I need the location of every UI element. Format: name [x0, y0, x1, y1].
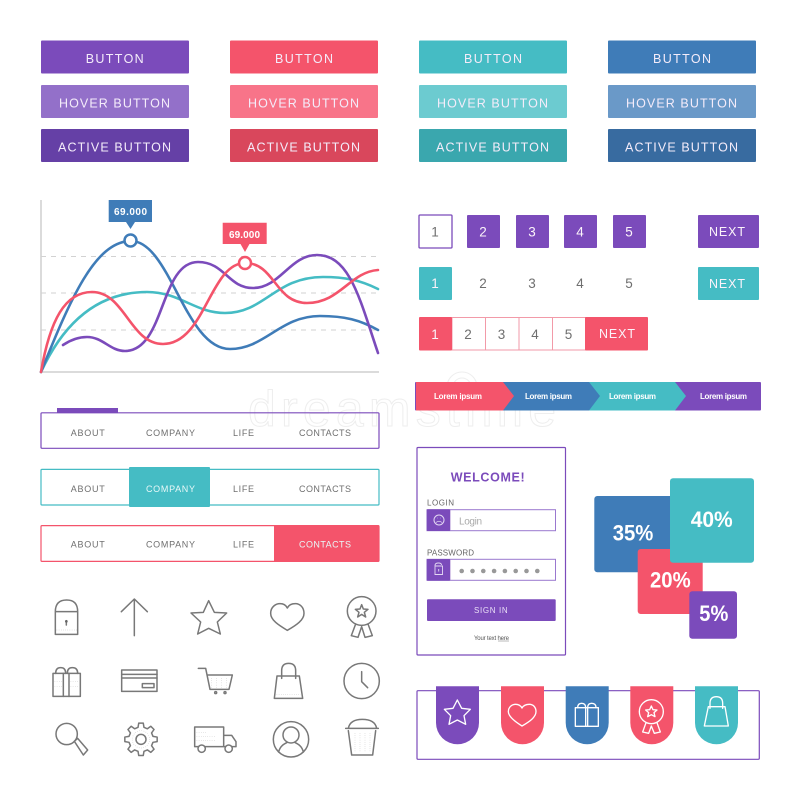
icon: clock: [344, 663, 379, 699]
block: 20%: 20%: [650, 568, 691, 593]
pagination: teal: [419, 267, 759, 300]
arrow breadcrumb bar: [415, 382, 761, 410]
block: 20%: [638, 549, 703, 614]
step labels: Lorem ipsum: [525, 392, 572, 401]
tab: award: [630, 686, 673, 744]
page numbers: 3: [528, 276, 536, 291]
active button: ACTIVE BUTTON: [247, 140, 360, 154]
icon: award rosette: [347, 597, 376, 637]
step labels: [434, 392, 747, 401]
tooltip: red value: [223, 223, 267, 252]
button group: purple: [41, 40, 189, 162]
footer link text: Your text here: [474, 636, 510, 642]
nav labels: CONTACTS: [299, 428, 351, 438]
line icon set: [53, 597, 379, 757]
page 1: 1: [431, 224, 439, 240]
marker: blue peak: [124, 234, 136, 246]
next button: [585, 317, 648, 350]
password label: PASSWORD: [427, 548, 474, 557]
page 2 to 5: [452, 318, 586, 350]
nav labels: ABOUT: [71, 484, 105, 494]
password input: [427, 559, 556, 581]
step labels: Lorem ipsum: [700, 392, 747, 401]
sign in button: [427, 599, 556, 621]
page 2: 2: [479, 224, 487, 240]
icon: delivery truck: [195, 727, 236, 752]
pagination: red: [419, 317, 648, 350]
button: [608, 40, 756, 74]
active button: [230, 129, 378, 162]
next button: NEXT: [599, 327, 635, 341]
button group: red: [230, 40, 378, 162]
page 5: [613, 215, 646, 248]
tab: heart: [501, 686, 544, 744]
percentage blocks: [594, 478, 754, 639]
icon: star: [191, 601, 227, 634]
icon: magnifier: [56, 723, 88, 755]
series: teal line: [41, 277, 378, 372]
active button: ACTIVE BUTTON: [58, 140, 171, 154]
page 2: [467, 215, 500, 248]
tab: bag: [695, 686, 738, 744]
tooltip: blue value: [109, 200, 152, 229]
page numbers: 5: [625, 276, 633, 291]
icon: heart: [271, 604, 304, 630]
tooltip: blue value: 69.000: [114, 207, 147, 218]
login label: LOGIN: [427, 499, 454, 508]
nav labels: CONTACTS: [299, 540, 351, 550]
hover button: [230, 85, 378, 118]
icon: up arrow: [121, 599, 147, 636]
block: 40%: 40%: [691, 507, 733, 532]
icon: user avatar: [273, 722, 309, 757]
hover button: [41, 85, 189, 118]
icon: gear: [125, 723, 157, 755]
page 2 to 5: 4: [531, 327, 539, 342]
hover button: HOVER BUTTON: [437, 96, 548, 110]
nav labels: ABOUT: [71, 428, 105, 438]
nav labels: LIFE: [233, 540, 254, 550]
page 5: 5: [625, 224, 633, 240]
icon: padlock: [55, 600, 78, 634]
bookmark tabs panel: [417, 686, 759, 759]
line chart: [41, 200, 379, 372]
button: BUTTON: [464, 52, 522, 66]
tab: star: [436, 686, 479, 744]
hover button: [419, 85, 567, 118]
page 4: 4: [576, 224, 584, 240]
nav bar: red: [41, 525, 379, 562]
block: 35%: 35%: [613, 521, 653, 546]
hover button: HOVER BUTTON: [248, 96, 359, 110]
page numbers: 4: [576, 276, 584, 291]
nav labels: [71, 428, 351, 438]
sign in button: SIGN IN: [474, 606, 508, 615]
nav bar: teal: [41, 467, 379, 507]
page numbers: 2: [479, 276, 487, 291]
button group: blue: [608, 40, 756, 162]
nav labels: COMPANY: [146, 484, 195, 494]
step: teal: [589, 382, 686, 410]
active button: [608, 129, 756, 162]
pagination: purple: [419, 215, 759, 248]
button: BUTTON: [653, 52, 711, 66]
active button: [419, 129, 567, 162]
nav labels: COMPANY: [146, 428, 195, 438]
nav bar: purple: [41, 408, 379, 448]
step labels: Lorem ipsum: [609, 392, 656, 401]
block: 40%: [670, 478, 754, 563]
page 2 to 5: 2: [464, 327, 472, 342]
page 1: 1: [431, 327, 439, 342]
block: 5%: 5%: [699, 601, 728, 626]
icon: shopping cart: [198, 668, 232, 694]
login card: [417, 448, 566, 655]
active button: ACTIVE BUTTON: [625, 140, 738, 154]
button: [230, 40, 378, 74]
step: red: [416, 382, 514, 410]
button: BUTTON: [275, 52, 333, 66]
icon: gift box: [53, 668, 80, 696]
page 1: 1: [431, 276, 439, 291]
active button: [41, 129, 189, 162]
page 1: [419, 267, 452, 300]
icon: credit card: [122, 670, 157, 691]
series: purple line: [63, 255, 378, 353]
button: [41, 40, 189, 74]
nav labels: LIFE: [233, 484, 254, 494]
step labels: Lorem ipsum: [434, 392, 482, 401]
hover button: HOVER BUTTON: [626, 96, 737, 110]
hover button: HOVER BUTTON: [59, 96, 170, 110]
hover button: [608, 85, 756, 118]
series: red line: [41, 263, 378, 372]
nav labels: COMPANY: [146, 540, 195, 550]
tooltip: red value: 69.000: [229, 230, 260, 241]
icon: trash bin: [346, 719, 378, 755]
page 3: [516, 215, 549, 248]
login input: [427, 509, 556, 531]
page 1: [419, 317, 452, 350]
watermark: dreamstime: [248, 381, 556, 437]
nav labels: [71, 540, 351, 550]
nav labels: ABOUT: [71, 540, 105, 550]
page numbers: [479, 276, 633, 291]
page 1: [419, 215, 452, 248]
tab: gift: [566, 686, 609, 744]
login input: Login: [459, 517, 482, 528]
page 4: [564, 215, 597, 248]
series: blue line: [41, 241, 378, 372]
button group: teal: [419, 40, 567, 162]
page 3: 3: [528, 224, 536, 240]
page 2 to 5: 3: [498, 327, 505, 342]
button: BUTTON: [86, 52, 144, 66]
nav labels: LIFE: [233, 428, 254, 438]
next button: NEXT: [709, 225, 745, 239]
icon: shopping bag: [274, 663, 303, 698]
step: blue: [503, 382, 600, 410]
active button: ACTIVE BUTTON: [436, 140, 549, 154]
next button: [698, 267, 759, 300]
nav labels: [71, 484, 351, 494]
marker: red peak: [239, 257, 251, 269]
block: 5%: [689, 591, 737, 639]
button: [419, 40, 567, 74]
next button: NEXT: [709, 277, 745, 291]
next button: [698, 215, 759, 248]
nav labels: CONTACTS: [299, 484, 351, 494]
page 2 to 5: 5: [565, 327, 572, 342]
heading: welcome: WELCOME!: [451, 471, 525, 485]
block: 35%: [594, 496, 674, 572]
